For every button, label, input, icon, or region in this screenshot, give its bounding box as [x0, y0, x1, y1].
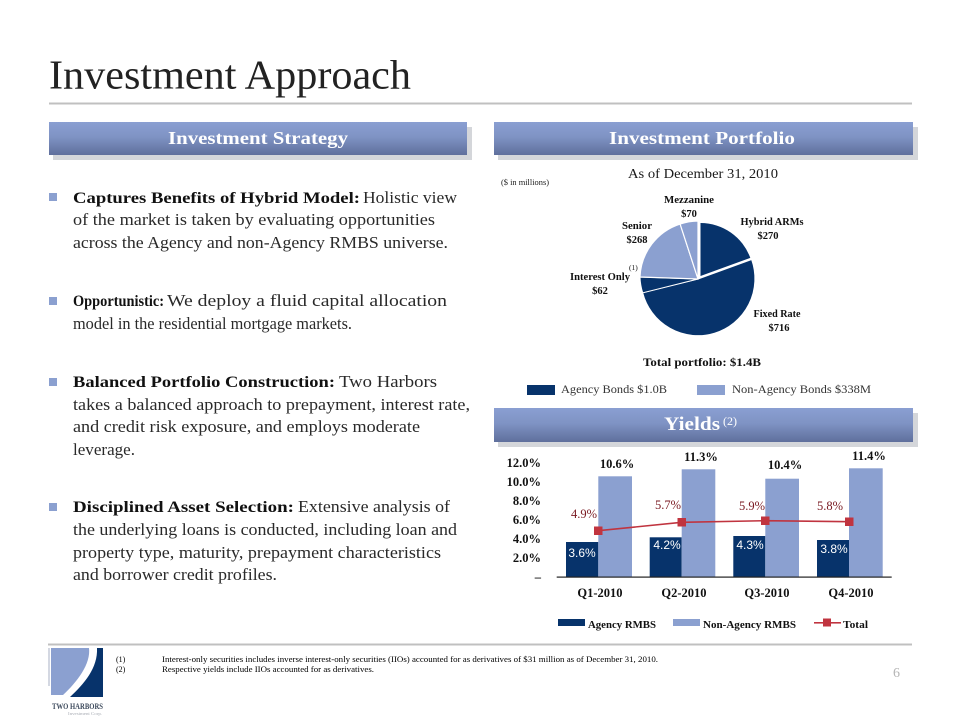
title: Investment Approach [49, 52, 411, 98]
y axis labels: 10.0% [507, 475, 541, 489]
slice: mezzanine [680, 221, 698, 279]
footnotes: (2) [116, 665, 126, 674]
pie labels: $268 [626, 235, 648, 246]
pie labels: $62 [592, 286, 608, 297]
total values: 4.9% [571, 507, 597, 521]
units note: ($ in millions) [501, 177, 549, 187]
panel: yields header: (2) [723, 414, 737, 428]
bullet: balanced portfolio construction [49, 372, 470, 459]
footer rule [48, 644, 912, 646]
total line series [594, 516, 854, 535]
bullet: captures benefits of hybrid model [49, 188, 457, 252]
bullet: captures benefits of hybrid model: Captures Benefits of Hybrid Model: [73, 190, 360, 207]
y axis labels: – [534, 570, 542, 584]
bullet: captures benefits of hybrid model: across the Agency and non-Agency RMBS universe. [73, 233, 448, 252]
total values: 5.7% [655, 498, 681, 512]
quarter labels: Q4-2010 [828, 586, 874, 600]
bullet: balanced portfolio construction: leverage. [73, 440, 135, 459]
slice: interest only [640, 277, 698, 293]
icon: Two Harbors logo: TWO HARBORS [52, 702, 103, 711]
bullet: captures benefits of hybrid model: Holistic view [363, 188, 457, 207]
pie labels: Hybrid ARMs [740, 217, 804, 228]
panel: yields header [494, 408, 918, 447]
non-agency values: 11.3% [684, 450, 718, 464]
bullet: disciplined asset selection: Disciplined Asset Selection: [73, 499, 294, 516]
page number: 6 [893, 666, 900, 681]
bullet: opportunistic: Opportunistic: [73, 293, 164, 310]
footnotes: Respective yields include IIOs accounted for as derivatives. [162, 665, 374, 674]
bullet: balanced portfolio construction: takes a balanced approach to prepayment, interest rate, [73, 395, 470, 414]
icon: Two Harbors logo [48, 648, 103, 716]
pie labels: $716 [768, 323, 790, 334]
quarter labels: Q2-2010 [661, 586, 707, 600]
agency values: 3.6% [568, 546, 596, 560]
quarter labels: Q1-2010 [577, 586, 623, 600]
agency values: 3.8% [820, 542, 848, 556]
non-agency values [600, 449, 886, 472]
y axis labels: 12.0% [507, 456, 541, 470]
pie labels [570, 195, 804, 334]
footnotes: (1) [116, 655, 126, 664]
total values: 5.9% [739, 499, 765, 513]
panel: investment portfolio header: Investment Portfolio [609, 128, 795, 148]
bullet: balanced portfolio construction: Two Harbors [339, 372, 437, 391]
panel: investment strategy header [49, 122, 472, 160]
bullet: disciplined asset selection: and borrower credit profiles. [73, 565, 277, 584]
slice: hybrid ARMs [700, 223, 750, 276]
bullet: balanced portfolio construction: Balanced Portfolio Construction: [73, 374, 335, 391]
pie labels: Interest Only [570, 272, 631, 283]
footnotes [116, 655, 658, 674]
pie labels: Fixed Rate [754, 309, 801, 320]
y axis labels [507, 456, 542, 584]
quarter labels: Q3-2010 [744, 586, 790, 600]
bullet: opportunistic: We deploy a fluid capital allocation [167, 291, 447, 310]
panel: investment strategy text [49, 188, 470, 584]
agency values: 4.3% [736, 538, 764, 552]
yields legend: Non-Agency RMBS [703, 619, 796, 631]
bullet: captures benefits of hybrid model: of the market is taken by evaluating opportunities [73, 210, 435, 229]
bullet: balanced portfolio construction: and credit risk exposure, and employs moderate [73, 417, 420, 436]
x axis line [557, 576, 892, 578]
bullet: disciplined asset selection: Extensive analysis of [298, 497, 451, 516]
footnotes: Interest-only securities includes inverse interest-only securities (IIOs) accounted for as derivatives of $31 million as of December 31, 2010. [162, 655, 658, 664]
agency values [568, 538, 848, 560]
y axis labels: 4.0% [513, 532, 541, 546]
pie legend: Agency Bonds $1.0B [561, 382, 667, 396]
pie labels: $270 [758, 231, 778, 242]
pie legend: Non-Agency Bonds $338M [732, 382, 871, 396]
slice: fixed rate [643, 260, 755, 336]
yields legend [558, 618, 868, 631]
quarter labels [577, 586, 874, 600]
y axis labels: 8.0% [513, 494, 541, 508]
non-agency RMBS bars [598, 468, 883, 577]
bullet: opportunistic: model in the residential mortgage markets. [73, 314, 352, 333]
pie labels: $70 [681, 209, 697, 220]
agency RMBS bars [566, 536, 849, 577]
pie chart [640, 221, 755, 336]
panel: investment strategy header: Investment Strategy [168, 128, 348, 148]
yields legend: Total [843, 619, 868, 631]
y axis labels: 6.0% [513, 513, 541, 527]
icon: Two Harbors logo: Investment Corp. [68, 711, 102, 716]
y axis labels: 2.0% [513, 551, 541, 565]
pie labels: Mezzanine [664, 195, 714, 206]
non-agency values: 11.4% [852, 449, 886, 463]
total values: 5.8% [817, 499, 843, 513]
chart subtitle: As of December 31, 2010 [628, 166, 778, 181]
agency values: 4.2% [653, 538, 681, 552]
bullet: disciplined asset selection: the underlying loans is conducted, including loan and [73, 520, 458, 539]
panel: yields header: Yields [664, 414, 720, 435]
pie labels: (1) [629, 263, 638, 272]
bullet: disciplined asset selection [49, 497, 458, 584]
total portfolio: Total portfolio: $1.4B [643, 355, 761, 369]
non-agency values: 10.6% [600, 457, 634, 471]
pie legend [527, 382, 871, 396]
panel: investment portfolio header [494, 122, 918, 160]
non-agency values: 10.4% [768, 458, 802, 472]
bullet: disciplined asset selection: property type, maturity, prepayment characteristics [73, 543, 441, 562]
total values [571, 498, 843, 521]
bullet: opportunistic [49, 291, 447, 333]
bar chart: yields [507, 449, 892, 600]
yields legend: Agency RMBS [588, 619, 656, 631]
pie labels: Senior [622, 221, 652, 232]
slice: senior [640, 224, 698, 279]
